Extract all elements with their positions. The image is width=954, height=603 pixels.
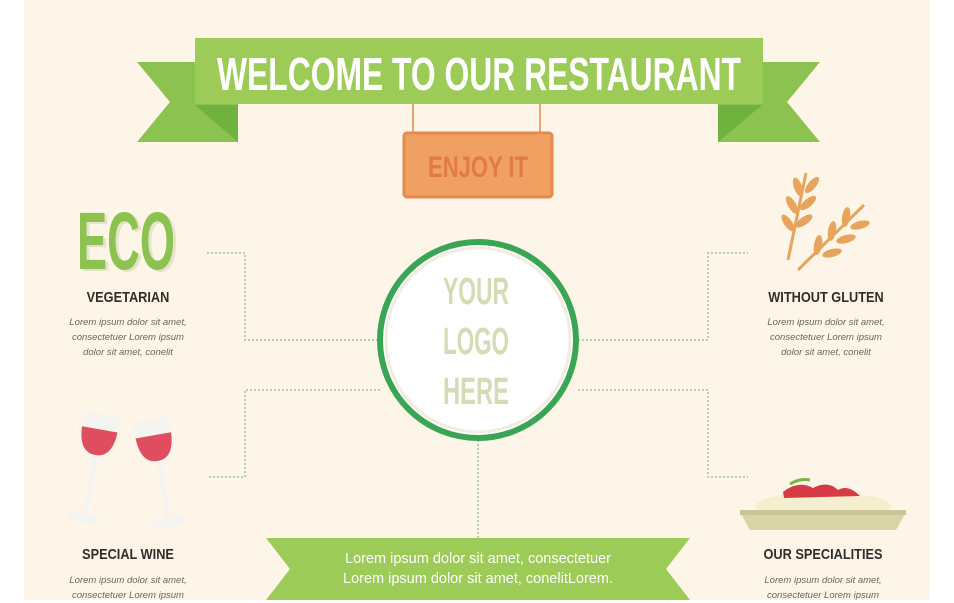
text: Lorem ipsum dolor sit amet, [69,575,187,586]
eco text [77,205,178,280]
logo circle [377,239,579,441]
block: special wine [66,411,187,601]
logo circle: YOUR [443,271,509,313]
icon: pasta dish [740,478,906,530]
right tail [718,62,820,142]
text [764,575,882,601]
ribbon text [343,551,613,587]
text: Lorem ipsum dolor sit amet, [764,575,882,586]
text: dolor sit amet, conelit [83,347,173,358]
icon: wine glasses [66,411,186,528]
heading: VEGETARIAN [87,289,169,306]
icon: wheat [781,172,870,271]
logo circle: HERE [443,371,509,413]
ribbon text: Lorem ipsum dolor sit amet, consectetuer [345,551,611,567]
text: consectetuer Lorem ipsum [767,590,879,601]
text: dolor sit amet, conelit [781,347,871,358]
sign: enjoy it [404,133,552,197]
block: our specialities [740,478,906,601]
bottom ribbon [266,538,690,600]
text: consectetuer Lorem ipsum [72,332,184,343]
heading: SPECIAL WINE [82,546,174,563]
text: Lorem ipsum dolor sit amet, [767,317,885,328]
title banner [137,38,820,198]
left tail [137,62,238,142]
block: without gluten [767,172,885,358]
sign strings [413,104,540,134]
heading: WITHOUT GLUTEN [768,289,884,306]
banner body [195,38,763,104]
sign: enjoy it: ENJOY IT [428,151,528,184]
text [767,317,885,358]
logo circle: LOGO [443,321,509,363]
heading: OUR SPECIALITIES [763,546,883,563]
text [69,575,187,601]
text: consectetuer Lorem ipsum [770,332,882,343]
ribbon text: Lorem ipsum dolor sit amet, conelitLorem. [343,571,613,587]
text: consectetuer Lorem ipsum [72,590,184,601]
text [69,317,187,358]
text: Lorem ipsum dolor sit amet, [69,317,187,328]
block: eco vegetarian [69,205,187,358]
